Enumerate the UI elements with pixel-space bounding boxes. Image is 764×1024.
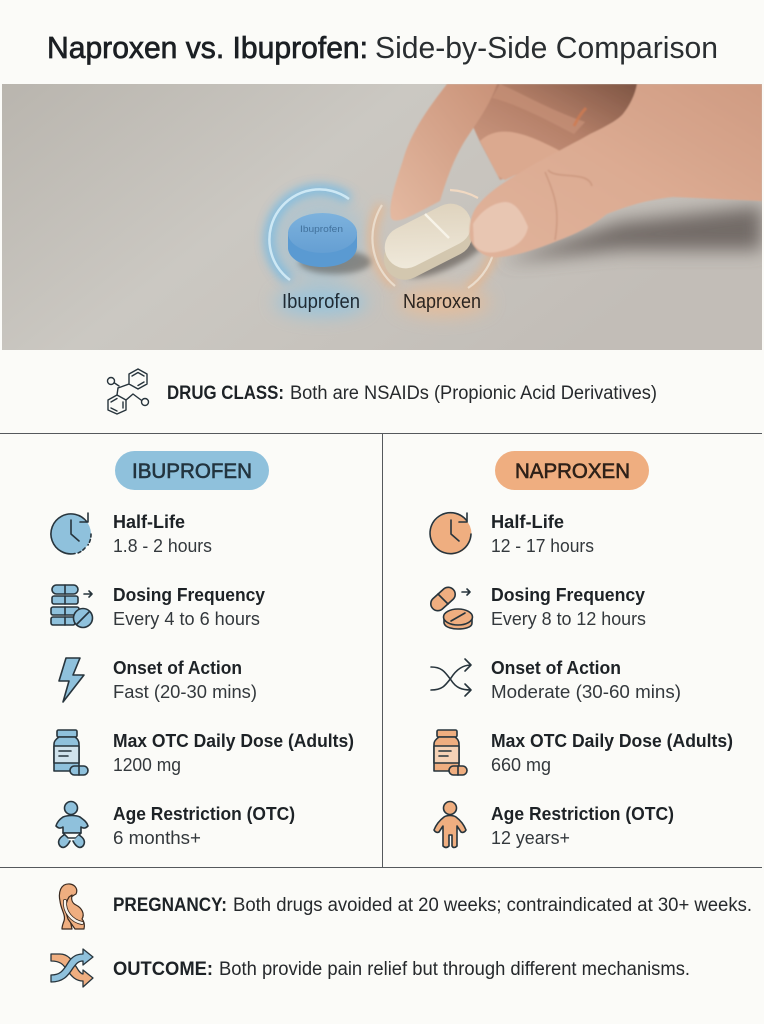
icon: chemical structure	[108, 369, 148, 414]
icon: pregnant woman	[59, 884, 84, 929]
ibuprofen tablet: Ibuprofen	[300, 224, 343, 235]
max dose text	[491, 731, 733, 775]
pregnancy text: PREGNANCY:	[113, 895, 227, 916]
icon: ibuprofen glow	[269, 189, 367, 316]
onset of action text: Onset of Action	[113, 658, 242, 678]
panel: ibuprofen	[51, 451, 354, 848]
naproxen tablet	[384, 204, 480, 281]
icon: half-life clock orange	[430, 513, 472, 554]
dosing frequency text	[113, 585, 265, 629]
half-life text	[113, 512, 212, 556]
title	[47, 30, 718, 65]
icon: medicine bottle orange	[434, 730, 467, 775]
photo labels: Naproxen	[403, 291, 481, 313]
dosing frequency text: Dosing Frequency	[491, 585, 645, 605]
ibuprofen tablet	[288, 213, 371, 274]
half-life text: 12 - 17 hours	[491, 535, 594, 556]
icon: dosing stack	[51, 585, 92, 628]
max dose text: Max OTC Daily Dose (Adults)	[491, 731, 733, 751]
title: Side-by-Side Comparison	[375, 30, 718, 65]
hand	[390, 84, 762, 257]
icon: half-life clock blue	[51, 513, 91, 554]
max dose text	[113, 731, 354, 775]
age restriction text	[113, 804, 295, 848]
half-life text: Half-Life	[491, 512, 564, 532]
icon: naproxen glow	[372, 190, 495, 316]
onset of action text	[113, 658, 257, 702]
icon: capsule and tablet	[428, 584, 472, 629]
heading: ibuprofen	[115, 451, 269, 490]
outcome text: Both provide pain relief but through different mechanisms.	[219, 959, 690, 980]
half-life text	[491, 512, 594, 556]
onset of action text	[491, 658, 681, 702]
hero photo: hand placing pills	[2, 84, 762, 350]
max dose text: Max OTC Daily Dose (Adults)	[113, 731, 354, 751]
panel: naproxen	[428, 451, 733, 848]
max dose text: 660 mg	[491, 754, 551, 775]
heading: ibuprofen: IBUPROFEN	[132, 460, 252, 483]
half-life text: Half-Life	[113, 512, 185, 532]
age restriction text: 12 years+	[491, 827, 570, 848]
drug class text: DRUG CLASS:	[167, 383, 284, 404]
outcome text: OUTCOME:	[113, 959, 213, 980]
age restriction text: 6 months+	[113, 827, 201, 848]
icon: baby	[56, 802, 88, 847]
pregnancy text: Both drugs avoided at 20 weeks; contraindicated at 30+ weeks.	[233, 895, 752, 916]
heading: naproxen: NAPROXEN	[515, 460, 630, 483]
icon: crossing ribbon arrows	[51, 949, 93, 987]
icon: lightning bolt	[59, 658, 84, 702]
half-life text: 1.8 - 2 hours	[113, 535, 212, 556]
dosing frequency text: Every 8 to 12 hours	[491, 608, 646, 629]
photo labels: Ibuprofen	[282, 291, 360, 313]
title: Naproxen vs. Ibuprofen:	[47, 30, 368, 65]
cast shadow of the hand	[500, 206, 762, 262]
max dose text: 1200 mg	[113, 754, 181, 775]
dosing frequency text: Dosing Frequency	[113, 585, 265, 605]
age restriction text	[491, 804, 674, 848]
onset of action text: Fast (20-30 mins)	[113, 681, 257, 702]
icon: crossing arrows	[431, 659, 471, 696]
drug class text: Both are NSAIDs (Propionic Acid Derivatives)	[290, 383, 657, 404]
icon: medicine bottle blue	[54, 730, 88, 775]
onset of action text: Onset of Action	[491, 658, 621, 678]
age restriction text: Age Restriction (OTC)	[491, 804, 674, 824]
age restriction text: Age Restriction (OTC)	[113, 804, 295, 824]
onset of action text: Moderate (30-60 mins)	[491, 681, 681, 702]
dosing frequency text: Every 4 to 6 hours	[113, 608, 260, 629]
heading: naproxen	[495, 451, 649, 490]
dosing frequency text	[491, 585, 646, 629]
photo labels	[284, 293, 480, 312]
icon: child	[434, 802, 466, 848]
